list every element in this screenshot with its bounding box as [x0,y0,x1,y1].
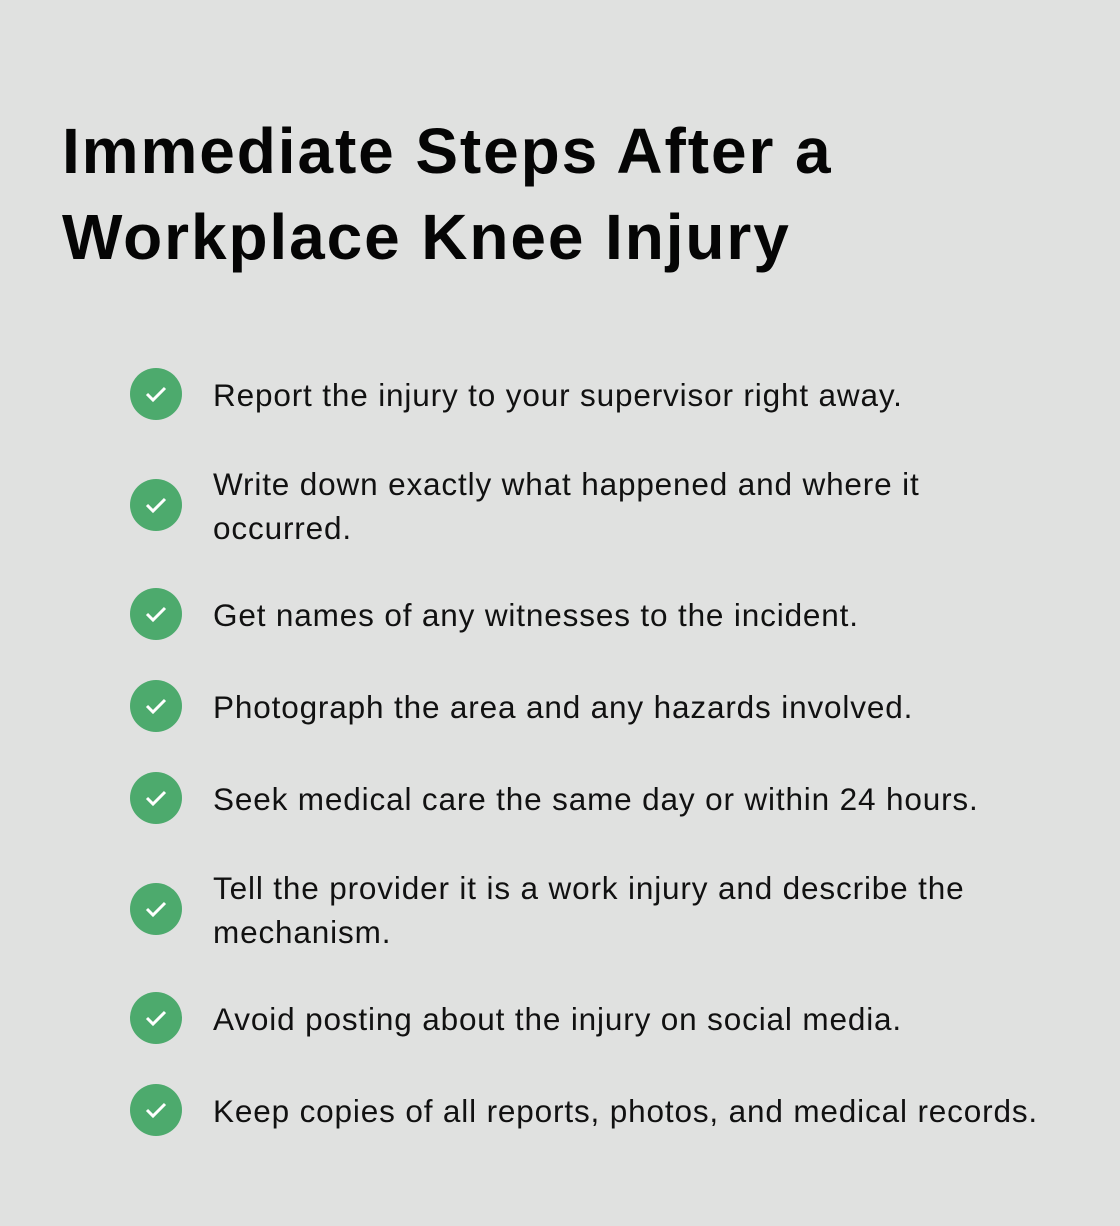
item 7: Avoid posting about the injury on social media. [213,1001,902,1037]
item 4: Photograph the area and any hazards involved. [213,689,913,725]
item 2: occurred. [213,510,352,546]
item 5 [130,772,979,824]
item 8: Keep copies of all reports, photos, and medical records. [213,1093,1038,1129]
item 5: Seek medical care the same day or within 24 hours. [213,781,979,817]
item 3 [130,588,859,640]
item 6: mechanism. [213,914,391,950]
item 6 [130,870,964,950]
item 3: Get names of any witnesses to the incident. [213,597,859,633]
item 4 [130,680,913,732]
title [62,115,832,273]
item 6: Tell the provider it is a work injury and describe the [213,870,964,906]
item 1 [130,368,903,420]
item 7 [130,992,902,1044]
item 2 [130,466,920,546]
item 8 [130,1084,1038,1136]
item 2: Write down exactly what happened and where it [213,466,920,502]
item 1: Report the injury to your supervisor right away. [213,377,903,413]
title: Workplace Knee Injury [62,201,791,273]
title: Immediate Steps After a [62,115,832,187]
